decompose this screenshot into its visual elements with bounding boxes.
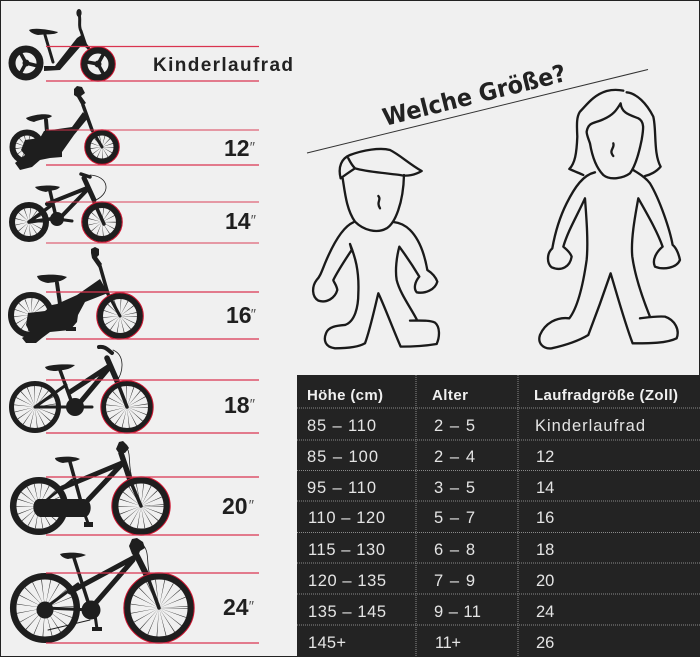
- table: size chart: 6 – 8: [434, 541, 475, 559]
- table: size chart: 145+: [308, 634, 346, 652]
- table: size chart: 14: [536, 479, 554, 497]
- bike row: 16 inch: 16: [226, 302, 252, 328]
- bike row: 12 inch: ″: [249, 139, 255, 156]
- bike row: 24 inch: ″: [248, 598, 254, 615]
- table: size chart: 85 – 100: [307, 448, 378, 466]
- bike row: 14 inch: ″: [250, 212, 256, 229]
- bike row: 16 inch: [11, 247, 259, 343]
- bike row: 12 inch: [12, 86, 259, 170]
- table: size chart: 7 – 9: [434, 572, 475, 590]
- table: size chart: 18: [536, 541, 554, 559]
- bike row: 12 inch: 12: [224, 135, 250, 161]
- table: size chart: 24: [536, 603, 554, 621]
- table: size chart: 115 – 130: [308, 541, 385, 559]
- table: size chart: Höhe (cm): [307, 387, 383, 404]
- bike row: 20 inch: 20: [222, 493, 248, 519]
- bike row: 18 inch: 18: [224, 392, 250, 418]
- bike row: 24 inch: [13, 538, 259, 643]
- table: size chart: 2 – 5: [434, 417, 475, 435]
- table: size chart: 95 – 110: [307, 479, 376, 497]
- figure: boy: [313, 149, 439, 348]
- table: size chart: 11+: [435, 634, 461, 652]
- heading: Welche Größe?: [307, 59, 648, 153]
- bike row: 18 inch: ″: [249, 396, 255, 413]
- bike row: Kinderlaufrad: [12, 9, 293, 81]
- table: size chart: Alter: [432, 387, 468, 404]
- heading: Welche Größe?: Welche Größe?: [380, 59, 569, 132]
- bike row: Kinderlaufrad: Kinderlaufrad: [153, 55, 293, 76]
- table: size chart: Kinderlaufrad: [535, 417, 645, 435]
- table: size chart: 3 – 5: [434, 479, 475, 497]
- table: size chart: 5 – 7: [434, 509, 475, 527]
- bike row: 20 inch: [13, 441, 259, 535]
- bike row: 14 inch: [12, 174, 259, 243]
- figure: girl: [539, 90, 680, 348]
- table: size chart: 16: [536, 509, 554, 527]
- table: size chart: 2 – 4: [434, 448, 475, 466]
- table: size chart: 20: [536, 572, 554, 590]
- table: size chart: 85 – 110: [307, 417, 376, 435]
- bike row: 18 inch: [12, 347, 259, 433]
- bike row: 14 inch: 14: [225, 208, 251, 234]
- table: size chart: 110 – 120: [308, 509, 385, 527]
- table: size chart: 120 – 135: [308, 572, 386, 590]
- bike row: 16 inch: ″: [250, 306, 256, 323]
- table: size chart: Laufradgröße (Zoll): [534, 387, 678, 404]
- table: size chart: 26: [536, 634, 554, 652]
- table: size chart: 135 – 145: [308, 603, 386, 621]
- table: size chart: [297, 375, 700, 657]
- bike row: 24 inch: 24: [223, 594, 249, 620]
- table: size chart: 12: [536, 448, 554, 466]
- table: size chart: 9 – 11: [434, 603, 481, 621]
- bike row: 20 inch: ″: [248, 497, 254, 514]
